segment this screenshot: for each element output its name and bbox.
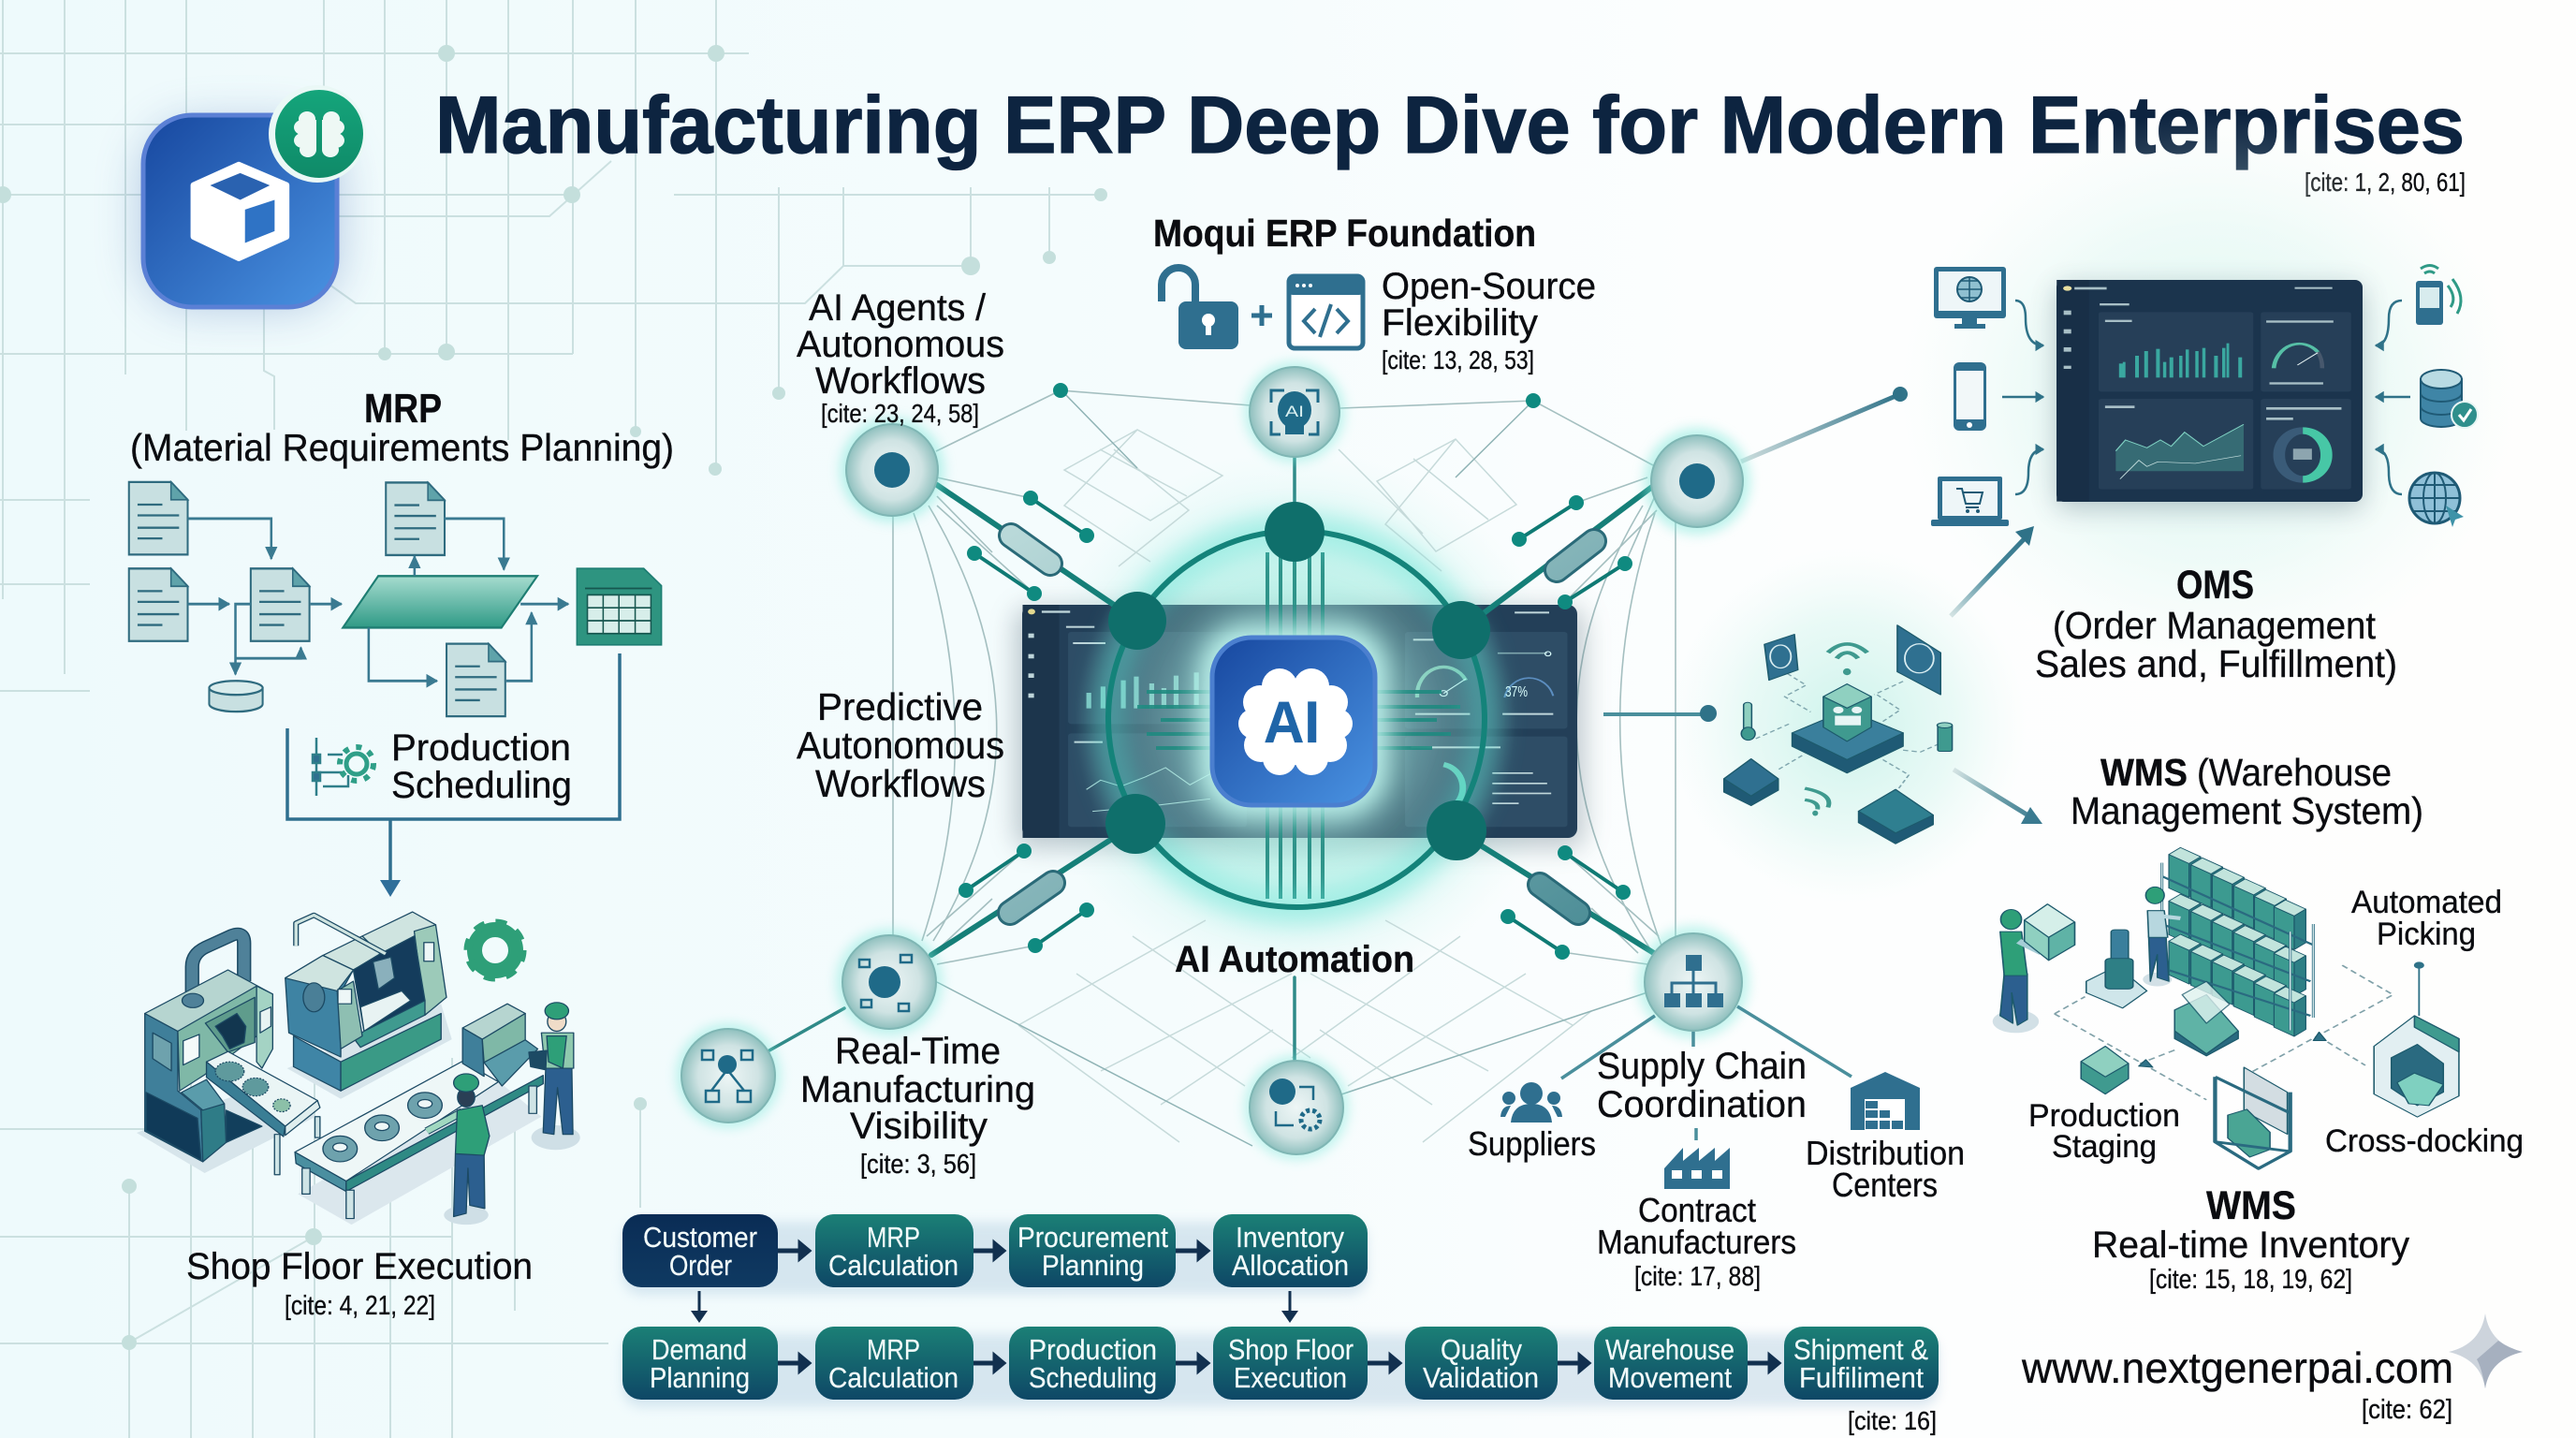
icon: suppliers	[1500, 1082, 1562, 1123]
icon: code window	[1289, 276, 1363, 348]
illustration: factory machines and workers	[137, 912, 580, 1225]
step: inventory allocation	[1213, 1214, 1368, 1287]
thin connector lines	[893, 390, 1676, 964]
central AI tile	[1200, 625, 1387, 817]
heading: warehouse management system: WMS	[2100, 751, 2188, 794]
label: real-time visibility: Real-Time	[835, 1031, 1001, 1072]
step: MRP calculation: MRP	[867, 1221, 920, 1254]
step: quality validation	[1405, 1327, 1558, 1400]
title: Manufacturing ERP Deep Dive for Modern Enterprises	[435, 81, 2465, 170]
soft glow behind hub	[1024, 449, 1567, 992]
label: real-time visibility	[800, 1031, 1035, 1180]
panel: shop floor execution	[137, 912, 580, 1321]
label: WMS real-time inventory: [cite: 15, 18, 19, 62]	[2149, 1265, 2352, 1295]
step: shipment and fulfilment: Fulfiliment	[1799, 1361, 1924, 1394]
label: predictive workflows: Workflows	[815, 762, 986, 805]
process flow	[622, 1214, 1939, 1435]
icon: factory	[1664, 1148, 1730, 1189]
arrow: down to shop floor	[380, 880, 401, 897]
gauge value: 37%	[1505, 684, 1528, 700]
central AI tile: AI	[1264, 690, 1320, 756]
thick links to outer nodes	[769, 457, 1657, 1062]
step: procurement planning	[1009, 1214, 1176, 1287]
node: real-time visibility	[836, 929, 943, 1035]
title citation: [cite: 1, 2, 80, 61]	[2305, 168, 2466, 197]
step: inventory allocation: Allocation	[1232, 1249, 1349, 1282]
label: automated picking: Picking	[2377, 917, 2476, 952]
flow citation: [cite: 16]	[1848, 1406, 1937, 1435]
label: predictive workflows: Predictive	[817, 685, 983, 728]
step: inventory allocation: Inventory	[1236, 1221, 1344, 1254]
label: production scheduling: Scheduling	[391, 765, 572, 806]
label: automated picking	[2351, 885, 2502, 952]
label: open-source flexibility: Flexibility	[1382, 302, 1538, 344]
flow arrows	[699, 1251, 1775, 1363]
halo behind OMS dashboard	[1900, 112, 2518, 674]
label: OMS: (Order Management	[2053, 604, 2377, 647]
hub halo	[1671, 548, 2027, 903]
label: AI agents: Autonomous	[797, 324, 1004, 365]
icon: scanner device	[2416, 266, 2461, 325]
panel: central AI network hub	[676, 212, 1908, 1180]
icon: production scheduling gear	[313, 738, 373, 796]
step: production scheduling: Scheduling	[1029, 1361, 1157, 1394]
label: WMS real-time inventory: WMS	[2206, 1183, 2296, 1228]
label: AI agents: [cite: 23, 24, 58]	[821, 399, 979, 428]
label: real-time visibility: [cite: 3, 56]	[860, 1150, 976, 1180]
step: shop floor execution: Shop Floor	[1228, 1333, 1354, 1366]
label: OMS	[2035, 563, 2397, 685]
label: AI agents	[797, 287, 1004, 428]
icon: plus	[1251, 305, 1272, 326]
central dashboard	[1016, 605, 1584, 847]
icon: globe cursor	[2409, 473, 2464, 527]
step: demand planning: Planning	[650, 1361, 750, 1394]
node: AI agents	[840, 418, 944, 522]
citation: [cite: 4, 21, 22]	[285, 1291, 435, 1321]
step: shipment and fulfilment: Shipment &	[1793, 1333, 1928, 1366]
icon: distribution warehouse	[1851, 1072, 1920, 1130]
label: WMS real-time inventory: Real-time Inventory	[2092, 1225, 2409, 1266]
label: WMS real-time inventory	[2092, 1183, 2409, 1295]
arrow: hub to OMS	[1951, 526, 2034, 616]
step: MRP calculation 2	[815, 1327, 973, 1400]
label: predictive workflows	[797, 685, 1004, 805]
step: demand planning	[622, 1327, 778, 1400]
heading: warehouse management system: (Warehouse	[2197, 751, 2392, 794]
step: shop floor execution	[1213, 1327, 1368, 1400]
icon: smartphone	[1954, 362, 1986, 431]
step: procurement planning: Planning	[1042, 1249, 1144, 1282]
icon: desktop globe	[1934, 267, 2006, 329]
label: contract manufacturers: Manufacturers	[1597, 1223, 1796, 1261]
panel: MRP	[129, 386, 674, 897]
label: real-time visibility: Manufacturing	[800, 1069, 1035, 1110]
label: supply chain: Supply Chain	[1597, 1046, 1807, 1087]
label: open-source flexibility: [cite: 13, 28, 53]	[1382, 345, 1534, 374]
label: Moqui ERP foundation: Moqui ERP Foundation	[1153, 212, 1536, 255]
panel: supply chain coordination	[1468, 1006, 1965, 1292]
label: shop floor execution: Shop Floor Execution	[186, 1246, 533, 1287]
links to partners	[1561, 1006, 1852, 1140]
node: right hub	[1644, 428, 1750, 535]
label: contract manufacturers	[1597, 1191, 1796, 1292]
label: distribution centers	[1806, 1134, 1965, 1204]
logo icon: cube with AI badge	[140, 85, 366, 309]
label: open-source flexibility	[1382, 266, 1596, 374]
icon: laptop cart	[1931, 477, 2009, 526]
label: supply chain: Coordination	[1597, 1084, 1807, 1125]
heading: warehouse management system	[2071, 751, 2423, 832]
small teal junction dots	[959, 383, 1632, 960]
label: supply chain	[1597, 1046, 1807, 1125]
step: MRP calculation 2: Calculation	[828, 1361, 959, 1394]
hub ring with nodes	[1105, 502, 1490, 907]
label: open-source flexibility: Open-Source	[1382, 266, 1596, 307]
label: AI agents: Workflows	[815, 360, 986, 402]
label: production scheduling	[391, 727, 572, 806]
label: OMS: Sales and, Fulfillment)	[2035, 642, 2397, 685]
label: cross-docking: Cross-docking	[2325, 1123, 2524, 1159]
warehouse illustration	[1993, 847, 2459, 1168]
label: production staging	[2028, 1098, 2180, 1165]
label: production staging: Production	[2028, 1098, 2180, 1134]
data bus lines	[1137, 552, 1460, 899]
label: AI automation: AI Automation	[1175, 939, 1414, 980]
label: production staging: Staging	[2052, 1129, 2157, 1165]
step: warehouse movement	[1594, 1327, 1748, 1400]
step: quality validation: Quality	[1441, 1333, 1522, 1366]
node: left network	[676, 1023, 781, 1128]
node: automation	[1244, 1055, 1349, 1160]
OMS dashboard	[2056, 280, 2363, 508]
label: AI agents: AI Agents /	[809, 287, 987, 329]
step: warehouse movement: Movement	[1608, 1361, 1732, 1394]
MRP process flowchart	[129, 482, 662, 716]
glow over dashboard	[1076, 501, 1515, 941]
step: production scheduling	[1009, 1327, 1176, 1400]
panel: IoT integration hub	[1603, 526, 2042, 903]
icon: green gear	[468, 923, 522, 977]
vertical flow arrowheads	[691, 1311, 1298, 1323]
link from dashboard	[1603, 705, 1717, 722]
heading: warehouse management system: Management System)	[2071, 789, 2423, 832]
label: suppliers: Suppliers	[1468, 1124, 1596, 1163]
step: shop floor execution: Execution	[1234, 1361, 1347, 1394]
label: distribution centers: Centers	[1832, 1166, 1938, 1204]
hub illustration	[1724, 625, 1953, 844]
step: MRP calculation 2: MRP	[867, 1333, 920, 1366]
label: distribution centers: Distribution	[1806, 1134, 1965, 1172]
icon: open lock	[1162, 268, 1238, 349]
icon: database check	[2421, 370, 2478, 428]
step: procurement planning: Procurement	[1017, 1221, 1168, 1254]
label: automated picking: Automated	[2351, 885, 2502, 920]
link: hub to OMS	[1741, 387, 1908, 462]
node: supply chain	[1637, 926, 1749, 1038]
step: production scheduling: Production	[1029, 1333, 1157, 1366]
panel: WMS	[1993, 751, 2524, 1295]
url: www.nextgenerpai.com	[2021, 1343, 2453, 1392]
step: warehouse movement: Warehouse	[1605, 1333, 1734, 1366]
node: AI head	[1244, 361, 1345, 462]
step: demand planning: Demand	[651, 1333, 747, 1366]
step: quality validation: Validation	[1423, 1361, 1539, 1394]
step: MRP calculation	[815, 1214, 973, 1287]
panel: OMS	[1900, 112, 2518, 685]
subheading: material requirements planning: (Material Requirements Planning)	[130, 426, 674, 469]
node: AI head: AI	[1285, 403, 1304, 420]
arrows into OMS dashboard	[2002, 301, 2410, 494]
connector bracket from schedule to shop floor	[287, 653, 620, 885]
label: real-time visibility: Visibility	[850, 1106, 988, 1147]
label: predictive workflows: Autonomous	[797, 724, 1004, 767]
icon: sparkle	[2449, 1313, 2523, 1388]
heading: MRP: MRP	[364, 386, 442, 432]
label: contract manufacturers: Contract	[1638, 1191, 1756, 1229]
step: shipment and fulfilment	[1784, 1327, 1939, 1400]
label: OMS: OMS	[2176, 563, 2254, 608]
background circuit grid	[0, 0, 1107, 1438]
step: customer order: Order	[669, 1249, 732, 1282]
step: MRP calculation: Calculation	[828, 1249, 959, 1282]
arrow: hub to WMS	[1954, 770, 2042, 824]
flow shadows	[622, 1222, 1939, 1407]
url citation: [cite: 62]	[2362, 1395, 2452, 1425]
label: production scheduling: Production	[391, 727, 571, 769]
label: contract manufacturers: [cite: 17, 88]	[1634, 1262, 1761, 1292]
step: customer order: Customer	[643, 1221, 757, 1254]
perspective grid lines	[937, 390, 1647, 1146]
website footer	[2021, 1313, 2523, 1425]
step: customer order	[622, 1214, 778, 1287]
